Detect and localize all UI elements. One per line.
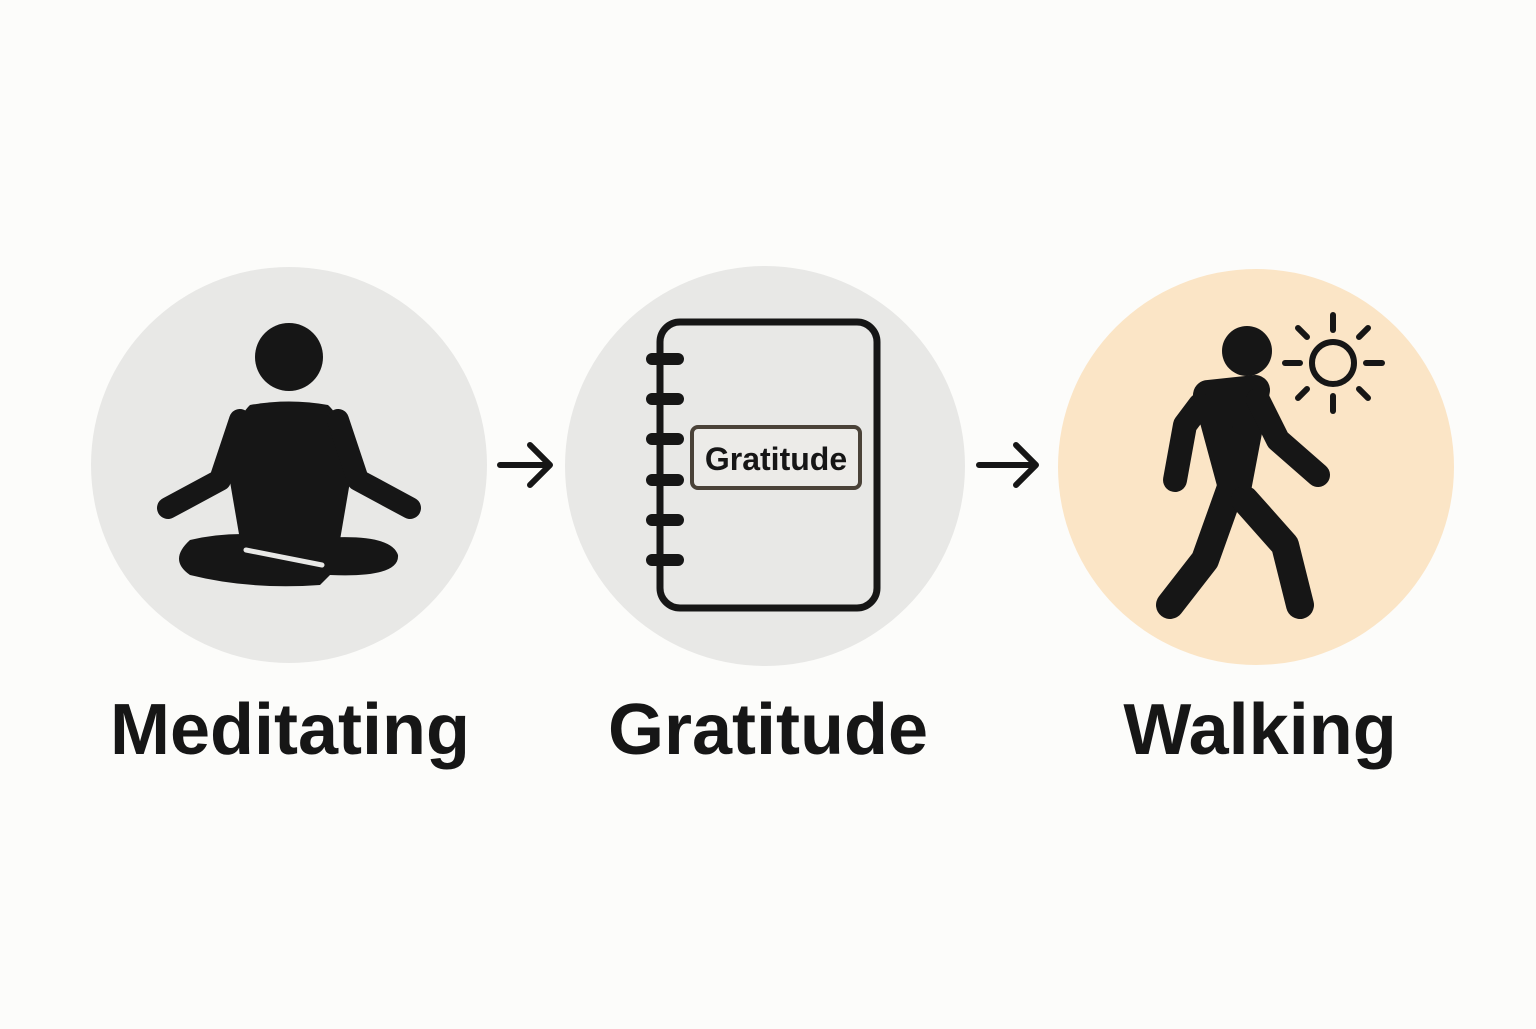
arrow 1 — [500, 445, 550, 485]
panel: meditating — [91, 267, 487, 663]
icon: notebook: Gratitude — [705, 441, 847, 477]
label: Meditating: Meditating — [110, 690, 470, 770]
label box — [692, 427, 860, 488]
icon: sun — [1285, 315, 1382, 411]
panel: walking — [1058, 269, 1454, 665]
icon: walking person — [1170, 326, 1318, 605]
panel: gratitude — [565, 266, 965, 666]
icon: notebook — [652, 322, 877, 608]
arrow 2 — [979, 445, 1036, 485]
icon: meditating person — [168, 323, 410, 586]
label: Walking: Walking — [1123, 690, 1397, 770]
label: Gratitude: Gratitude — [608, 690, 928, 770]
